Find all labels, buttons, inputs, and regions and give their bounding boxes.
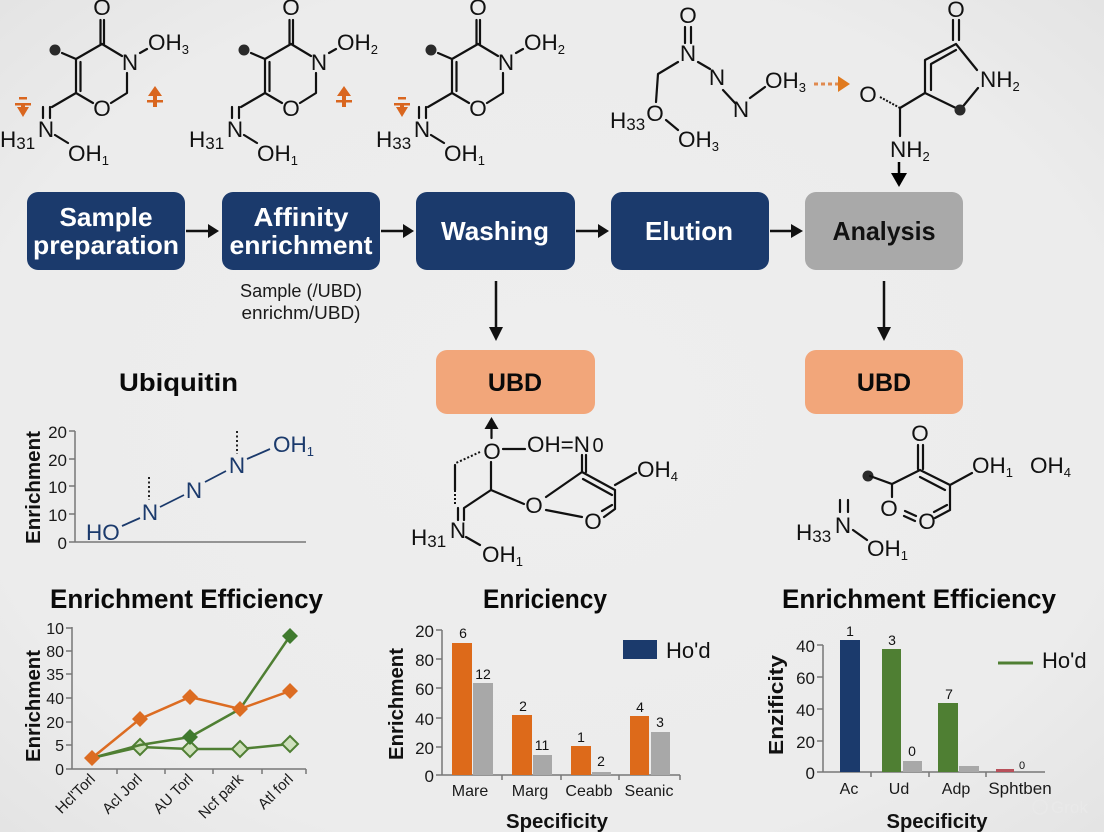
molecule 6: 31 <box>427 532 446 551</box>
molecule 4: N <box>733 97 749 122</box>
title: enriciency center: Enriciency <box>483 584 607 614</box>
bar chart center: 20 <box>415 622 434 641</box>
chart: enrichment with molecule overlay: 1 <box>307 444 314 459</box>
chart: enrichment with molecule overlay: HO <box>86 520 120 545</box>
step: affinity enrichment: Affinity <box>254 202 349 232</box>
arrow: molecule 5 to analysis <box>891 162 907 187</box>
watermark: Grok <box>1051 798 1088 817</box>
bar chart right: 7 <box>945 686 953 702</box>
molecule 3: 2 <box>558 42 565 57</box>
molecule 7: 1 <box>901 548 908 563</box>
molecule 7: H <box>796 520 812 545</box>
bar chart center: 2 <box>519 698 527 714</box>
line chart: 20 <box>46 715 64 732</box>
bar chart center: 60 <box>415 680 434 699</box>
arrow: elution to analysis <box>770 224 803 238</box>
molecule 6 <box>411 417 678 569</box>
bar chart center: Mare <box>452 783 488 800</box>
UBD box center: UBD <box>488 369 542 397</box>
line chart: 10 <box>46 621 64 638</box>
molecule 1: 31 <box>16 134 35 153</box>
title: enrichment efficiency right: Enrichment Efficiency <box>782 584 1056 614</box>
molecule 2 <box>189 0 378 168</box>
caption: sample enrichment: Sample (/UBD) <box>240 281 362 301</box>
chart: enrichment with molecule overlay: 20 <box>48 451 67 470</box>
molecule 6: 4 <box>671 469 678 484</box>
legend right: Ho'd <box>1042 648 1087 673</box>
bar chart right: Adp <box>942 781 970 798</box>
bar chart center: Seanic <box>625 783 673 800</box>
bar chart center: Ceabb <box>565 783 613 800</box>
UBD box center <box>436 350 595 414</box>
bar chart right: 40 <box>796 701 815 720</box>
step: affinity enrichment <box>222 192 380 270</box>
bar chart center: 2 <box>597 753 605 769</box>
molecule 4: N <box>709 65 725 90</box>
bar chart right: 60 <box>796 669 815 688</box>
step: washing: Washing <box>441 216 549 246</box>
bar chart right <box>766 623 1052 832</box>
molecule 2: OH <box>337 30 371 55</box>
bar chart center: 0 <box>425 767 434 786</box>
step: sample preparation <box>27 192 185 270</box>
line chart: Atl forl <box>255 771 297 813</box>
step: washing <box>416 192 575 270</box>
molecule 7: OH <box>867 536 901 561</box>
legend center: Ho'd <box>666 638 711 663</box>
molecule 4: 33 <box>626 115 645 134</box>
chart: enrichment with molecule overlay: N <box>142 500 158 525</box>
bar chart center: 1 <box>577 729 585 745</box>
molecule 6: N <box>450 518 466 543</box>
bar chart center: 12 <box>475 666 491 682</box>
molecule 5 <box>859 0 1020 164</box>
bar chart center <box>386 622 680 832</box>
molecule 6: O <box>584 509 602 534</box>
molecule 5: O <box>859 82 877 107</box>
step: sample preparation: Sample <box>60 202 152 232</box>
step: analysis: Analysis <box>832 216 936 246</box>
molecule 6: 1 <box>516 554 523 569</box>
molecule 4: 3 <box>712 139 719 154</box>
molecule 1: 3 <box>182 42 189 57</box>
bar chart center: Marg <box>512 783 548 800</box>
legend right <box>998 648 1087 673</box>
molecule 4: O <box>646 101 664 126</box>
molecule 2: H <box>189 127 205 152</box>
bar chart center: 11 <box>535 737 549 753</box>
chart: enrichment with molecule overlay: 10 <box>48 506 67 525</box>
line chart: 40 <box>46 691 64 708</box>
series: dark green <box>92 628 298 758</box>
line chart: 5 <box>55 738 64 755</box>
molecule 1: H <box>0 127 16 152</box>
molecule 6: OH=N <box>527 432 590 457</box>
molecule 7 <box>796 421 1071 563</box>
chart: enrichment with molecule overlay: N <box>229 453 245 478</box>
bar chart right: 3 <box>888 632 896 648</box>
chart: enrichment with molecule overlay: OH <box>273 432 307 457</box>
molecule 1: 1 <box>102 153 109 168</box>
bar chart center: 80 <box>415 651 434 670</box>
caption: sample enrichment <box>240 281 362 323</box>
line chart: 35 <box>46 667 64 684</box>
molecule 7: N <box>835 513 851 538</box>
molecule 7: 1 <box>1006 465 1013 480</box>
molecule 5: NH <box>980 67 1012 92</box>
axis label: Enrichment <box>386 648 408 760</box>
molecule 3: OH <box>524 30 558 55</box>
line chart: Ncf park <box>195 770 247 822</box>
molecule 4: H <box>610 108 626 133</box>
bar chart right: 1 <box>846 623 854 639</box>
molecule 3: 1 <box>478 153 485 168</box>
chart: enrichment with molecule overlay: 10 <box>48 478 67 497</box>
axis label: Enzificity <box>766 654 788 755</box>
arrow: washing to UBD <box>489 281 503 341</box>
arrow: affinity to washing <box>381 224 414 238</box>
step: analysis <box>805 192 963 270</box>
molecule 4 <box>610 3 806 154</box>
molecule 7: O <box>911 421 929 446</box>
molecule 4: OH <box>678 127 712 152</box>
molecule 6: H <box>411 525 427 550</box>
molecule 5: NH <box>890 137 922 162</box>
watermark <box>1033 798 1088 817</box>
molecule 7: 4 <box>1064 465 1071 480</box>
molecule 2: OH <box>257 141 291 166</box>
arrow: dotted orange <box>814 76 850 92</box>
molecule 4: O <box>679 3 697 28</box>
chart: enrichment with molecule overlay: 0 <box>58 534 67 553</box>
molecule 6: OH <box>482 542 516 567</box>
series: light green <box>92 736 298 758</box>
bar chart right: 0 <box>1019 760 1025 772</box>
molecule 2: 1 <box>291 153 298 168</box>
line chart: AU Torl <box>150 771 197 817</box>
molecule 2: 2 <box>371 42 378 57</box>
arrow: analysis to UBD <box>877 281 891 341</box>
molecule 4: 3 <box>799 80 806 95</box>
molecule 7: O <box>918 509 936 534</box>
heading: ubiquitin: Ubiquitin <box>119 369 238 397</box>
line chart: Acl Jorl <box>99 771 146 818</box>
molecule 6: OH <box>637 457 671 482</box>
molecule 7: O <box>880 496 898 521</box>
molecule 4: N <box>680 41 696 66</box>
molecule 6: 0 <box>592 435 604 457</box>
series: orange <box>84 683 298 766</box>
bar chart right: Ud <box>889 781 909 798</box>
molecule 5: 2 <box>922 149 930 164</box>
axis label: Enrichment <box>23 431 45 544</box>
molecule 7: OH <box>1030 453 1064 478</box>
axis label: Enrichment <box>23 650 45 762</box>
bar chart center: 6 <box>459 625 467 641</box>
step: sample preparation: preparation <box>33 230 179 260</box>
molecule 3: 33 <box>392 134 411 153</box>
bar chart center: 20 <box>415 739 434 758</box>
molecule 1 <box>0 0 189 168</box>
line chart: Hcl'Torl <box>52 771 99 817</box>
bar chart right: 40 <box>796 637 815 656</box>
chart: enrichment with molecule overlay <box>23 423 314 553</box>
molecule 6: O <box>525 493 543 518</box>
molecule 3: H <box>376 127 392 152</box>
UBD box right <box>805 350 963 414</box>
bar chart right: 0 <box>908 743 916 759</box>
molecule 1: OH <box>148 30 182 55</box>
molecule 5: 2 <box>1012 79 1020 94</box>
UBD box right: UBD <box>857 369 911 397</box>
line chart <box>23 621 306 822</box>
molecule 3 <box>376 0 565 168</box>
line chart: 0 <box>55 762 64 779</box>
molecule 6: O <box>483 439 501 464</box>
molecule 2: 31 <box>205 134 224 153</box>
chart: enrichment with molecule overlay: 20 <box>48 423 67 442</box>
title: enrichment efficiency left: Enrichment Efficiency <box>50 584 323 614</box>
caption: sample enrichment: enrichm/UBD) <box>242 303 360 323</box>
step: affinity enrichment: enrichment <box>230 230 373 260</box>
bar chart center: 40 <box>415 710 434 729</box>
bar chart center: 3 <box>656 714 664 730</box>
bar chart right: Sphtben <box>988 779 1052 798</box>
molecule 3: OH <box>444 141 478 166</box>
bar chart right: 20 <box>796 733 815 752</box>
bar chart center: 4 <box>636 699 644 715</box>
arrow: sample to affinity <box>186 224 219 238</box>
chart: enrichment with molecule overlay: N <box>186 478 202 503</box>
line chart: 80 <box>46 644 64 661</box>
arrow: washing to elution <box>576 224 609 238</box>
molecule 1: OH <box>68 141 102 166</box>
step: elution <box>611 192 769 270</box>
molecule 4: OH <box>765 68 799 93</box>
bar chart right: 0 <box>806 764 815 783</box>
molecule 7: OH <box>972 453 1006 478</box>
molecule 7: 33 <box>812 527 831 546</box>
legend center <box>623 638 711 663</box>
step: elution: Elution <box>645 216 733 246</box>
bar chart right: Ac <box>840 781 858 798</box>
